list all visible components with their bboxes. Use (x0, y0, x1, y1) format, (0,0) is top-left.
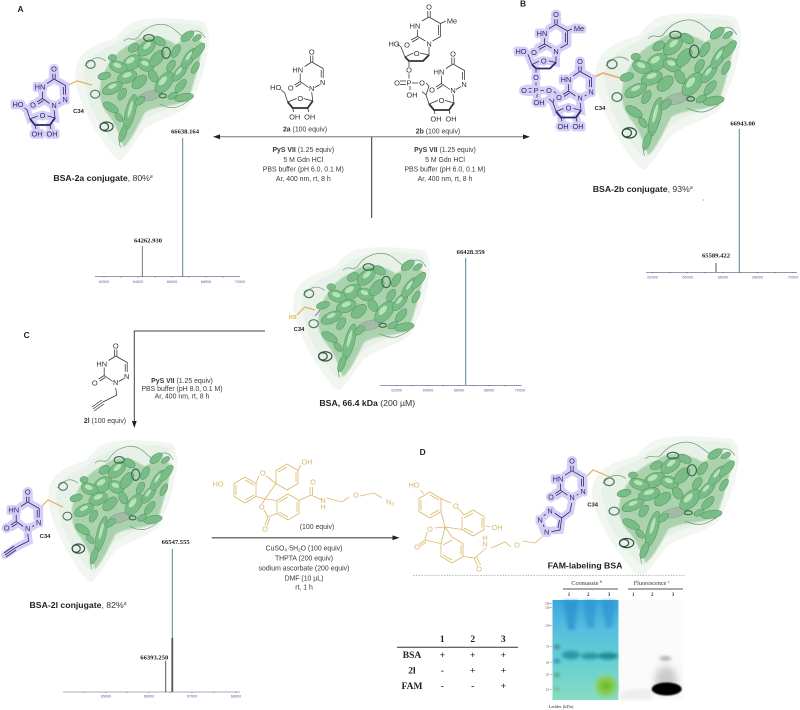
purple nucleoside 2a adduct: OH (31, 129, 43, 138)
mass spectrum B: 68000 (752, 276, 763, 280)
gel headers: c (668, 579, 670, 584)
structure 2b: O (419, 79, 425, 88)
purple dinucleotide 2b adduct: N (577, 94, 583, 103)
structure 2b: O (414, 49, 420, 58)
click conditions: sodium ascorbate (200 equiv) (259, 565, 349, 572)
FAM moiety orange: O (427, 525, 433, 534)
FAM moiety orange: O (476, 565, 482, 574)
triazine triazole adduct purple: N (547, 506, 553, 515)
conditions for 2a: PBS buffer (pH 6.0, 0.1 M) (263, 166, 344, 174)
FAM azide reagent: O (262, 525, 268, 534)
mass spectrum C: 66000 (144, 694, 154, 698)
FAM moiety orange: HO (408, 481, 420, 490)
treatment table: 3 (501, 635, 506, 645)
mass spectrum C: 66393.250 (140, 654, 169, 662)
click conditions: CuSO (266, 545, 284, 552)
purple dinucleotide 2b adduct: O (556, 93, 562, 102)
ladder ticks: 50 (546, 660, 549, 664)
triazine triazole adduct purple: N (569, 493, 575, 502)
panel B: BSA-2b conjugate (515, 0, 798, 280)
mass spectrum BSA: 66428.359 (457, 249, 485, 256)
structure 2b: Me (447, 16, 457, 25)
mass spectrum A: 68000 (201, 280, 211, 284)
panel label A: A (17, 4, 24, 14)
conditions for 2b (404, 147, 486, 183)
FAM moiety orange: N (482, 540, 488, 548)
treatment table: - (441, 666, 444, 676)
ladder ticks: 15 (546, 687, 549, 691)
mass spectrum C: 66547.555 (162, 539, 190, 546)
purple dinucleotide 2b adduct: O (531, 48, 537, 57)
conditions for 2a (263, 147, 344, 183)
purple nucleoside 2a adduct: HO (12, 100, 24, 109)
FAM azide reagent: O (259, 503, 265, 512)
treatment table: + (470, 651, 475, 661)
FAM azide reagent: O (353, 491, 359, 500)
conditions for 2l: PyS VII (1.25 equiv) (151, 378, 213, 385)
treatment table: + (470, 666, 475, 676)
gel headers (563, 579, 683, 598)
mass spectrum B: 65589.422 (702, 252, 731, 260)
purple 2l adduct: HN (8, 506, 19, 515)
structure 2l: N (113, 378, 118, 387)
purple nucleoside 2a adduct: O (51, 65, 57, 74)
FAM azide reagent: O (310, 477, 316, 486)
purple dinucleotide 2b adduct: HN (561, 75, 571, 84)
FAM azide reagent: OH (301, 457, 313, 466)
purple dinucleotide 2b adduct: OH (572, 122, 584, 131)
gel headers: 1 (568, 593, 571, 598)
linker to C34 B (592, 73, 620, 78)
structure 2l: O (92, 379, 98, 388)
label 2a: 2a (100 equiv) (283, 126, 327, 133)
conditions for 2l (141, 378, 223, 401)
structure 2l: HN (96, 360, 107, 369)
purple dinucleotide 2b adduct: N (553, 47, 559, 56)
structure 2b: N (450, 86, 456, 95)
C34 label: C34 (73, 109, 85, 115)
click conditions: 4 (284, 548, 287, 552)
purple nucleoside 2a adduct: O (40, 111, 46, 120)
treatment table: + (501, 651, 506, 661)
linker to C34 C (40, 500, 63, 508)
structure 2b: O (394, 79, 400, 88)
panel label C: C (24, 330, 30, 340)
mass spectrum A: 64262.930 (134, 238, 163, 244)
triazine triazole adduct purple: N (537, 516, 543, 525)
purple dinucleotide 2b adduct: O (546, 86, 552, 95)
caption FAM-labeling BSA: FAM-labeling BSA (548, 561, 623, 571)
purple dinucleotide 2b adduct: HN (537, 29, 547, 38)
purple 2l adduct (4, 488, 41, 557)
mass spectrum A: 66638.164 (171, 128, 200, 136)
click conditions: ·5H (287, 545, 298, 552)
conditions for 2b: Ar, 400 nm, rt, 8 h (418, 176, 473, 183)
FAM azide reagent: N (386, 497, 391, 506)
gel headers: 3 (608, 593, 611, 598)
mass spectrum BSA: 68000 (484, 388, 494, 392)
FAM moiety orange: O (453, 501, 459, 510)
speck (702, 199, 704, 201)
mass spectrum B (646, 120, 798, 280)
mass spectrum A: 70000 (235, 280, 245, 284)
FAM azide reagent: H (320, 502, 326, 512)
purple dinucleotide 2b adduct: Me (574, 24, 584, 33)
fluorescence gel image (620, 600, 684, 700)
mass spectrum C: 68000 (231, 694, 241, 698)
purple dinucleotide 2b adduct: OH (557, 122, 569, 131)
caption BSA-2b conjugate: BSA-2b conjugate, 93% (593, 184, 690, 194)
structure 2b: O (406, 66, 412, 75)
triazine triazole adduct purple: O (548, 492, 554, 501)
linker to C34 (66, 81, 92, 86)
panel D: FAM-labeling BSA (397, 436, 739, 709)
purple dinucleotide 2b adduct: O (541, 56, 547, 66)
purple dinucleotide 2b adduct: HO (515, 47, 527, 56)
structure 2b: HN (410, 21, 420, 30)
structure 2a: N (309, 84, 314, 93)
FAM equivalents: (100 equiv) (300, 524, 334, 531)
structure 2b: O (439, 96, 445, 105)
mass spectrum BSA (380, 249, 525, 392)
structure 2b: O (404, 41, 410, 50)
structure 2l: N (124, 372, 129, 381)
structure 2a: O (288, 84, 294, 93)
conditions for 2b: PBS buffer (pH 6.0, 0.1 M) (404, 166, 486, 174)
gel headers: 2 (587, 593, 590, 598)
click conditions: rt, 1 h (295, 585, 313, 592)
triazine triazole adduct purple: N (580, 487, 586, 496)
gel headers: 1 (632, 593, 635, 598)
panel: reagents 2a and 2b (213, 3, 530, 218)
panel C: BSA-2l conjugate (4, 330, 265, 698)
purple nucleoside 2a adduct: HN (35, 83, 45, 92)
FAM moiety orange: OH (491, 523, 503, 532)
mass spectrum BSA: 64000 (423, 388, 433, 392)
protein structure A (75, 18, 209, 160)
caption BSA-2a conjugate: a (150, 174, 153, 180)
treatment table: - (471, 682, 474, 692)
purple dinucleotide 2b adduct: O (533, 73, 539, 82)
C34 label C: C34 (40, 534, 51, 540)
mass spectrum BSA: 62000 (391, 388, 402, 392)
structure 2a (270, 48, 325, 121)
mass spectrum BSA: 66000 (454, 388, 464, 392)
FAM moiety orange: O (414, 543, 420, 552)
conditions for 2a: 5 M Gdn HCl (283, 157, 324, 164)
arrows from BSA to A and B (213, 134, 530, 218)
gel headers: Fluorescence (634, 580, 666, 587)
treatment table: + (501, 666, 506, 676)
treatment table: FAM (402, 682, 422, 692)
purple dinucleotide 2b adduct: N (588, 88, 594, 97)
structure 2b: HO (388, 40, 400, 49)
caption BSA-2b conjugate: a (690, 185, 693, 191)
ladder ticks: 250 (545, 601, 550, 605)
structure 2a: N (320, 78, 325, 87)
mass spectrum A (95, 128, 245, 284)
structure 2a: OH (289, 112, 300, 121)
ladder caption: Ladder (kDa) (549, 704, 574, 709)
gel headers: b (600, 579, 602, 584)
triazine triazole adduct purple: N (544, 527, 549, 536)
protein structure BSA (293, 247, 430, 390)
FAM moiety orange: H (482, 534, 488, 542)
click conditions: O (100 equiv) (301, 545, 342, 552)
conditions for 2a: PyS VII (1.25 equiv) (272, 147, 334, 154)
label 2b: 2b (100 equiv) (416, 129, 460, 136)
structure 2b: N (461, 80, 467, 89)
protein structure B (595, 13, 741, 170)
mass spectrum C (63, 539, 241, 698)
panel label D: D (420, 447, 426, 457)
structure 2b: OH (445, 114, 457, 123)
structure 2l: O (113, 342, 119, 351)
ladder ticks: 150 (545, 605, 550, 609)
structure 2b (388, 3, 467, 123)
mass spectrum B: 62000 (647, 276, 658, 280)
structure 2b: O (426, 3, 432, 12)
caption BSA-2a conjugate: BSA-2a conjugate, 80% (53, 173, 150, 183)
click conditions: DMF (10 µL) (285, 575, 323, 582)
treatment table: 1 (440, 635, 445, 645)
structure 2b: O (450, 50, 456, 59)
treatment table: 2 (470, 635, 475, 645)
mass spectrum B: 66943.00 (730, 120, 756, 128)
structure 2a: HO (270, 83, 281, 92)
FAM azide reagent: N (320, 496, 326, 505)
arrow from BSA to C (132, 331, 265, 428)
FAM moiety orange (408, 481, 543, 574)
triazine triazole adduct purple (537, 456, 586, 536)
mass spectrum A: 64000 (133, 280, 143, 284)
FAM azide reagent: HO (212, 480, 224, 489)
reaction arrow (212, 535, 400, 540)
purple 2l adduct: O (4, 524, 10, 533)
mass spectrum A: 66000 (167, 280, 177, 284)
FAM moiety orange: O (514, 541, 520, 550)
panel A: BSA-2a conjugate (12, 4, 245, 284)
click conditions: THPTA (200 equiv) (275, 555, 333, 562)
protein structure C (48, 440, 177, 582)
purple nucleoside 2a adduct: O (30, 101, 36, 110)
purple dinucleotide 2b adduct: O (521, 86, 527, 95)
panel: native BSA (289, 247, 525, 408)
purple 2l adduct: N (36, 518, 41, 527)
structure 2b: O (429, 86, 435, 95)
mass spectrum B: 70000 (788, 276, 798, 280)
gel headers: 2 (651, 593, 654, 598)
treatment table: BSA (403, 651, 421, 661)
purple dinucleotide 2b adduct: OH (533, 98, 545, 107)
panel: click reaction (212, 457, 400, 592)
label 2l: 2l (100 equiv) (84, 418, 126, 425)
ladder ticks: 75 (546, 645, 549, 649)
structure 2b: N (426, 40, 432, 49)
treatment table: + (440, 651, 445, 661)
purple dinucleotide 2b adduct: O (566, 104, 572, 113)
FAM azide reagent: O (260, 468, 266, 477)
structure 2b: HN (434, 68, 444, 77)
conditions for 2b: 5 M Gdn HCl (425, 157, 465, 164)
conditions for 2a: Ar, 400 nm, rt, 8 h (276, 176, 331, 183)
ladder ticks: 100 (545, 624, 550, 628)
conditions for 2l: PBS buffer (pH 8.0, 0.1 M) (141, 386, 223, 393)
caption BSA-2l conjugate: a (124, 601, 127, 607)
mass spectrum A: 62000 (99, 280, 109, 284)
purple 2l adduct: N (25, 524, 30, 533)
structure 2a: O (297, 94, 303, 103)
gel headers: Coomassie (571, 580, 599, 587)
click conditions: 2 (298, 548, 301, 552)
purple nucleoside 2a adduct: N (51, 101, 57, 110)
conditions for 2l: Ar, 400 nm, rt, 8 h (155, 394, 210, 401)
structure 2b: P (407, 78, 412, 87)
protein structure D (592, 436, 739, 576)
mass spectrum B: 66000 (718, 276, 728, 280)
structure 2a: HN (292, 66, 303, 75)
purple nucleoside 2a adduct: N (62, 95, 68, 104)
gel headers: 3 (672, 593, 675, 598)
mass spectrum B: 64000 (682, 276, 693, 280)
purple 2l adduct: O (25, 488, 31, 497)
mass spectrum BSA: 70000 (515, 388, 525, 392)
FAM azide reagent: 3 (391, 502, 394, 508)
HS cysteine side chain: HS (289, 315, 297, 321)
structure 2b: OH (406, 91, 418, 100)
triazine triazole adduct purple: HN (553, 474, 563, 483)
FAM azide reagent (212, 457, 394, 534)
click conditions (259, 545, 349, 592)
ladder ticks: 25 (546, 672, 549, 676)
purple dinucleotide 2b adduct: O (577, 57, 583, 66)
mass spectrum C: 65000 (101, 694, 111, 698)
structure 2a: O (309, 48, 315, 57)
treatment table: 2l (408, 666, 416, 676)
HS cysteine side chain (289, 307, 320, 321)
treatment table (397, 635, 518, 692)
treatment table: - (441, 682, 444, 692)
C34 label B: C34 (595, 106, 606, 112)
ladder ticks (545, 601, 552, 691)
structure 2b: OH (430, 114, 442, 123)
structure 2l (92, 342, 129, 411)
caption BSA-2l conjugate: BSA-2l conjugate, 82% (30, 600, 124, 610)
treatment table: + (501, 682, 506, 692)
Coomassie gel image (545, 600, 621, 701)
mass spectrum C: 67000 (187, 694, 197, 698)
structure 2a: OH (304, 112, 315, 121)
C34 label BSA: C34 (294, 327, 305, 333)
purple nucleoside 2a adduct (12, 65, 68, 138)
purple dinucleotide 2b adduct: O (553, 10, 559, 19)
purple dinucleotide 2b adduct: P (534, 86, 539, 95)
purple dinucleotide 2b adduct (515, 10, 594, 131)
caption BSA: BSA, 66.4 kDa (200 µM) (319, 398, 415, 408)
conditions for 2b: PyS VII (1.25 equiv) (414, 147, 476, 154)
C34 label D: C34 (587, 502, 599, 508)
linker to C34 D (583, 470, 610, 480)
purple nucleoside 2a adduct: OH (46, 129, 58, 138)
triazine triazole adduct purple: O (569, 456, 575, 465)
